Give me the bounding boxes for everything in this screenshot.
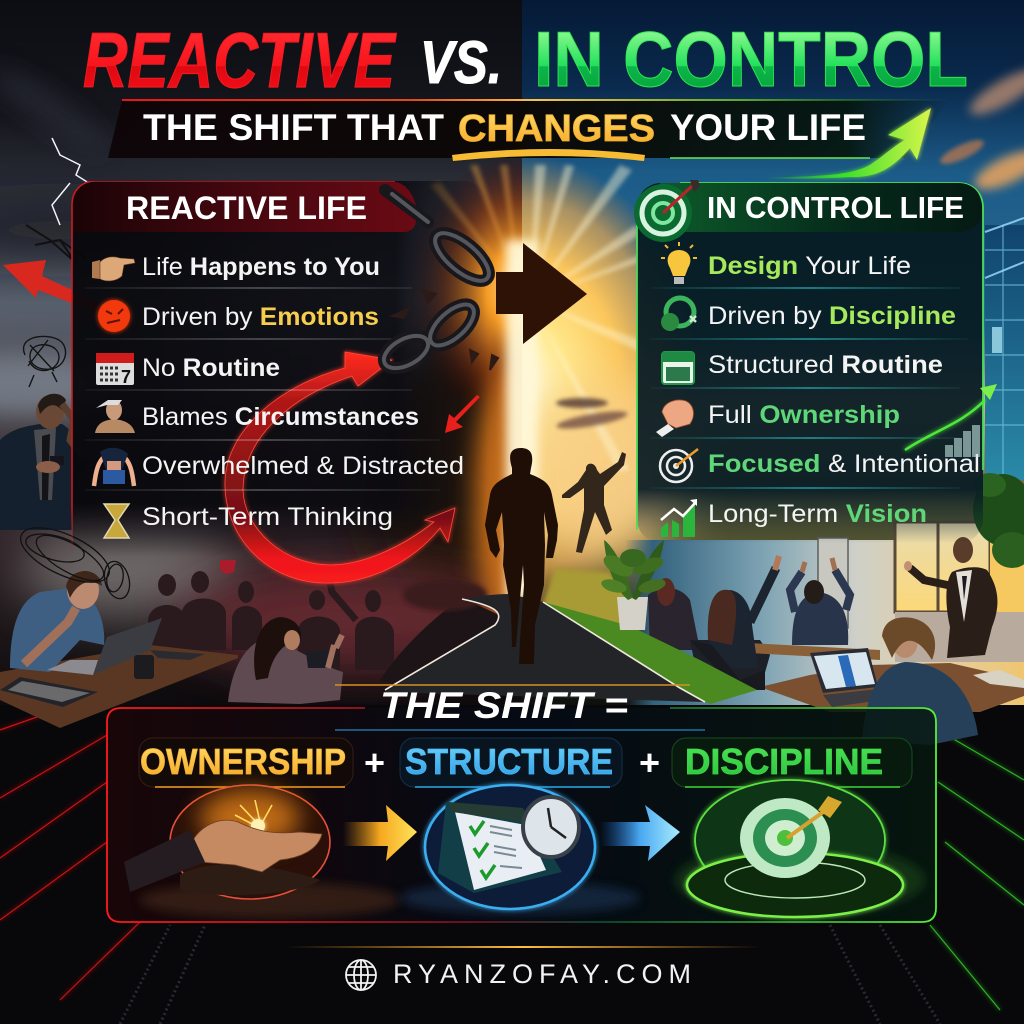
stress scribble above desk [13, 517, 134, 601]
row: no routine [96, 353, 280, 387]
subtitle banner: YOUR LIFE [670, 107, 866, 148]
green growth arrow and bars near right panel [905, 384, 997, 457]
sunburst [417, 158, 708, 614]
second figure with raised arm [562, 452, 626, 553]
row: driven by discipline: Driven by Discipline [708, 302, 956, 330]
row: life happens to you: Life Happens to You [142, 253, 380, 281]
structure term: STRUCTURE [405, 741, 613, 782]
right panel: in control life [634, 180, 983, 543]
left panel: reactive life [72, 181, 487, 583]
crowd silhouettes [148, 560, 394, 670]
plus sign one: + [364, 742, 385, 783]
row: long-term vision: Long-Term Vision [708, 500, 927, 528]
row: focused and intentional: Focused & Intentional [708, 450, 980, 478]
right office scene [625, 520, 1024, 745]
footer line [285, 946, 761, 948]
row: long-term vision [661, 499, 927, 537]
header: in control life [660, 183, 982, 232]
tree on right [973, 473, 1024, 568]
row: no routine: 7 [121, 367, 131, 387]
discipline medallion with target [687, 780, 903, 917]
panel backing [72, 181, 487, 556]
row: structured routine: Structured Routine [708, 351, 943, 379]
title: IN CONTROL [534, 15, 968, 103]
desk with stressed man left [0, 571, 238, 728]
title: VS. [420, 29, 502, 96]
icon: target with arrow [634, 180, 700, 242]
lightning and scribbles [24, 138, 108, 387]
plus sign two: + [639, 742, 660, 783]
header: reactive life: REACTIVE LIFE [126, 190, 367, 226]
row: design your life [661, 242, 911, 284]
gold arrow [343, 805, 417, 861]
row: full ownership [656, 400, 900, 437]
red circular arrow [225, 352, 455, 583]
central walking figure [485, 448, 558, 664]
structure medallion with calendar and clock [425, 785, 595, 909]
broken chain [379, 190, 498, 375]
road with rubble and grass [380, 568, 757, 704]
the shift heading: THE SHIFT = [380, 685, 628, 726]
plant [600, 540, 667, 630]
bottom panel: the shift equation [107, 685, 936, 922]
subtitle banner: THE SHIFT THAT [143, 107, 444, 148]
ownership term: OWNERSHIP [140, 741, 346, 782]
building with graph on right [985, 218, 1024, 480]
row: overwhelmed and distracted: Overwhelmed & Distracted [142, 452, 464, 480]
website url: RYANZOFAY.COM [393, 959, 691, 989]
icon: globe [346, 960, 376, 990]
row: blames circumstances: Blames Circumstances [142, 403, 419, 431]
row: design your life: Design Your Life [708, 252, 911, 280]
subtitle banner [108, 99, 950, 161]
header: reactive life [73, 182, 416, 232]
row: no routine: No Routine [142, 354, 280, 382]
bottom band [0, 692, 1024, 1024]
header: in control life: IN CONTROL LIFE [707, 190, 964, 225]
red arrow top left [3, 260, 100, 312]
central arrow [496, 243, 587, 344]
row: driven by discipline [661, 298, 956, 331]
row: overwhelmed and distracted [94, 448, 464, 486]
row: full ownership: Full Ownership [708, 401, 900, 429]
discipline term: DISCIPLINE [685, 741, 883, 782]
title [83, 15, 968, 104]
row: short-term thinking: Short-Term Thinking [142, 503, 393, 531]
small red arrow [445, 395, 480, 433]
ownership medallion with hand [124, 785, 330, 899]
row: focused and intentional [660, 449, 980, 482]
woman with phone [228, 617, 343, 704]
row: short-term thinking [104, 503, 393, 538]
row: structured routine [662, 351, 943, 384]
title: REACTIVE [83, 16, 397, 104]
row: driven by emotions: Driven by Emotions [142, 303, 379, 331]
subtitle banner: CHANGES [458, 108, 655, 150]
man with phone left [0, 394, 84, 530]
blue arrow [600, 805, 680, 861]
green arrow from banner [760, 108, 931, 179]
